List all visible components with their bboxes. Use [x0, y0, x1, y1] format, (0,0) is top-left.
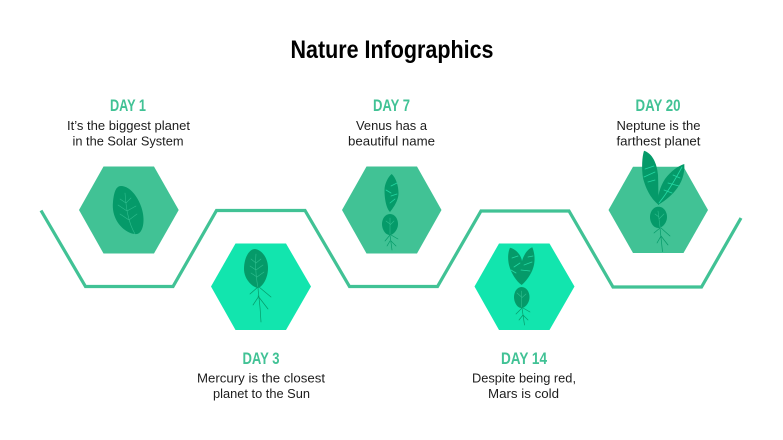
day 3 description: planet to the Sun: [213, 386, 310, 401]
day 1 hexagon: [79, 166, 179, 254]
day 20 hexagon: [608, 167, 708, 253]
day 14 label: DAY 14: [501, 350, 548, 368]
day 7 description: Venus has a: [356, 118, 428, 133]
day 3 hexagon: [211, 244, 311, 330]
step: day 20: [608, 97, 708, 253]
day 7 label: DAY 7: [373, 97, 410, 115]
icon: leaf with roots: [244, 249, 271, 322]
icon: seedling with one upper leaf: [382, 174, 398, 250]
icon: grown plant with two leaves: [642, 151, 684, 252]
step: day 7: [342, 97, 442, 254]
day 3 label: DAY 3: [242, 350, 280, 368]
day 20 label: DAY 20: [636, 97, 680, 115]
step: day 3: [197, 244, 325, 401]
step: day 1: [67, 97, 190, 254]
zigzag timeline line: [41, 210, 741, 287]
step: day 14: [472, 244, 576, 401]
day 20 description: [616, 118, 701, 148]
day 1 description: [67, 118, 190, 148]
day 14 description: Mars is cold: [488, 386, 559, 401]
day 7 description: beautiful name: [348, 134, 435, 148]
title: Nature Infographics: [290, 36, 494, 64]
icon: seedling with two upper leaves: [508, 247, 535, 325]
day 1 label: DAY 1: [110, 97, 146, 115]
icon: single leaf: [113, 186, 144, 234]
day 14 description: Despite being red,: [472, 370, 576, 386]
day 14 description: [472, 370, 576, 401]
day 7 description: [348, 118, 435, 148]
day 20 description: Neptune is the: [616, 118, 700, 133]
day 1 description: It’s the biggest planet: [67, 118, 190, 133]
day 3 description: Mercury is the closest: [197, 370, 325, 386]
day 1 description: in the Solar System: [72, 134, 184, 148]
day 3 description: [197, 370, 325, 401]
day 14 hexagon: [474, 244, 574, 330]
day 20 description: farthest planet: [616, 134, 701, 148]
day 7 hexagon: [342, 166, 442, 254]
